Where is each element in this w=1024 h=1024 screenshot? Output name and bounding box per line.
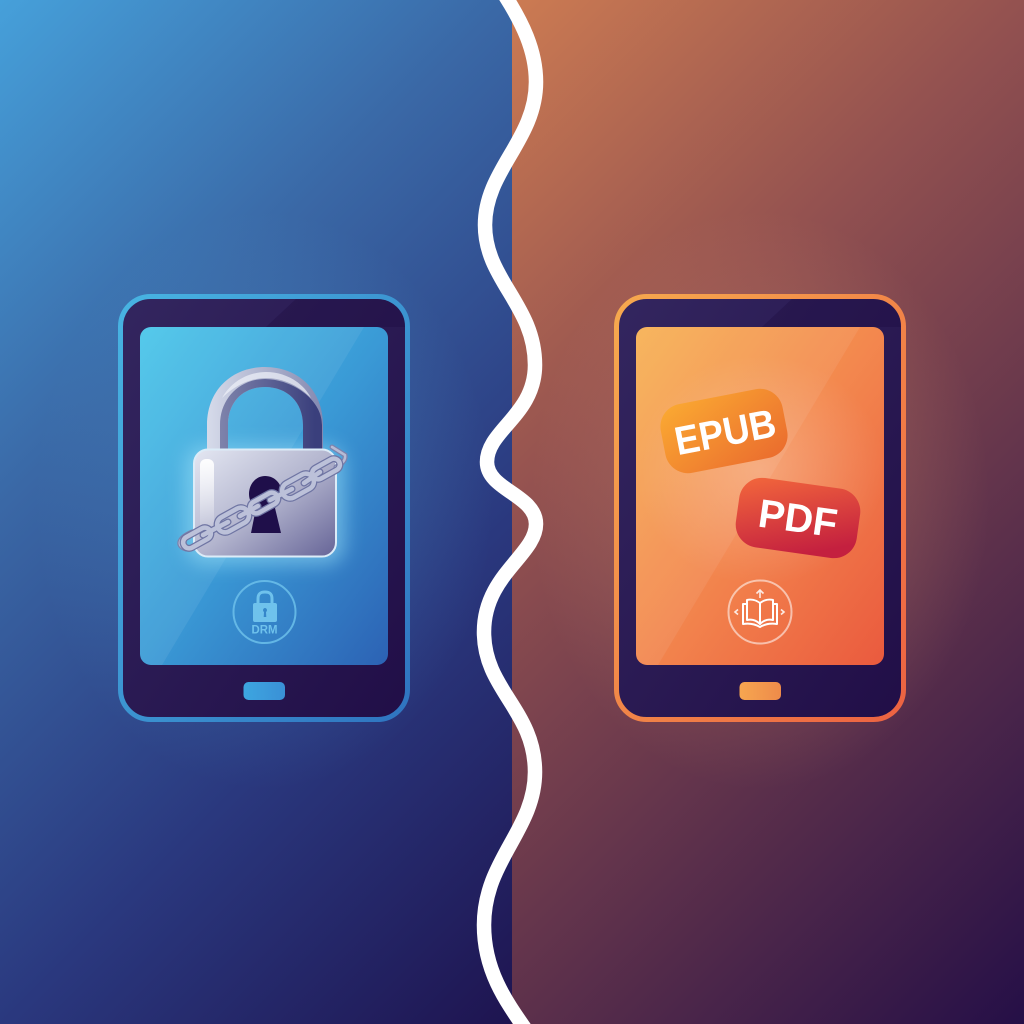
shackle inner shade <box>220 379 322 452</box>
icon: book <box>743 600 777 627</box>
panel: right orange background <box>512 0 1024 1024</box>
home button <box>740 682 781 700</box>
lock glow <box>185 445 345 565</box>
icon: DRM badge <box>234 581 296 643</box>
lock body highlight <box>200 459 214 535</box>
icon: small padlock <box>253 592 277 622</box>
badge glow <box>635 355 885 585</box>
PDF tag <box>733 475 863 561</box>
shackle highlight <box>222 372 311 398</box>
screen diagonal sheen <box>140 327 364 665</box>
screen diagonal sheen <box>636 327 860 665</box>
DRM label: DRM <box>252 624 278 636</box>
shackle <box>207 367 323 452</box>
tablet body <box>616 296 904 720</box>
chain <box>180 447 345 551</box>
icon: arrows <box>735 590 784 614</box>
tablet: locked DRM <box>120 296 408 720</box>
keyhole <box>249 476 282 533</box>
EPUB tag: EPUB <box>671 401 780 464</box>
icon: open book badge <box>728 580 792 644</box>
glow behind left tablet <box>34 210 494 790</box>
screen <box>140 327 388 665</box>
PDF tag: PDF <box>756 492 840 546</box>
EPUB tag <box>656 385 792 477</box>
tablet: open formats <box>616 296 904 720</box>
home button <box>244 682 285 700</box>
glow behind right tablet <box>530 210 990 790</box>
lock body <box>194 450 336 556</box>
wavy divider <box>484 0 536 1024</box>
screen <box>636 327 884 665</box>
tablet body <box>120 296 408 720</box>
body reflection <box>266 299 405 327</box>
padlock <box>180 367 345 556</box>
panel: left blue background <box>0 0 512 1024</box>
body reflection <box>762 299 901 327</box>
